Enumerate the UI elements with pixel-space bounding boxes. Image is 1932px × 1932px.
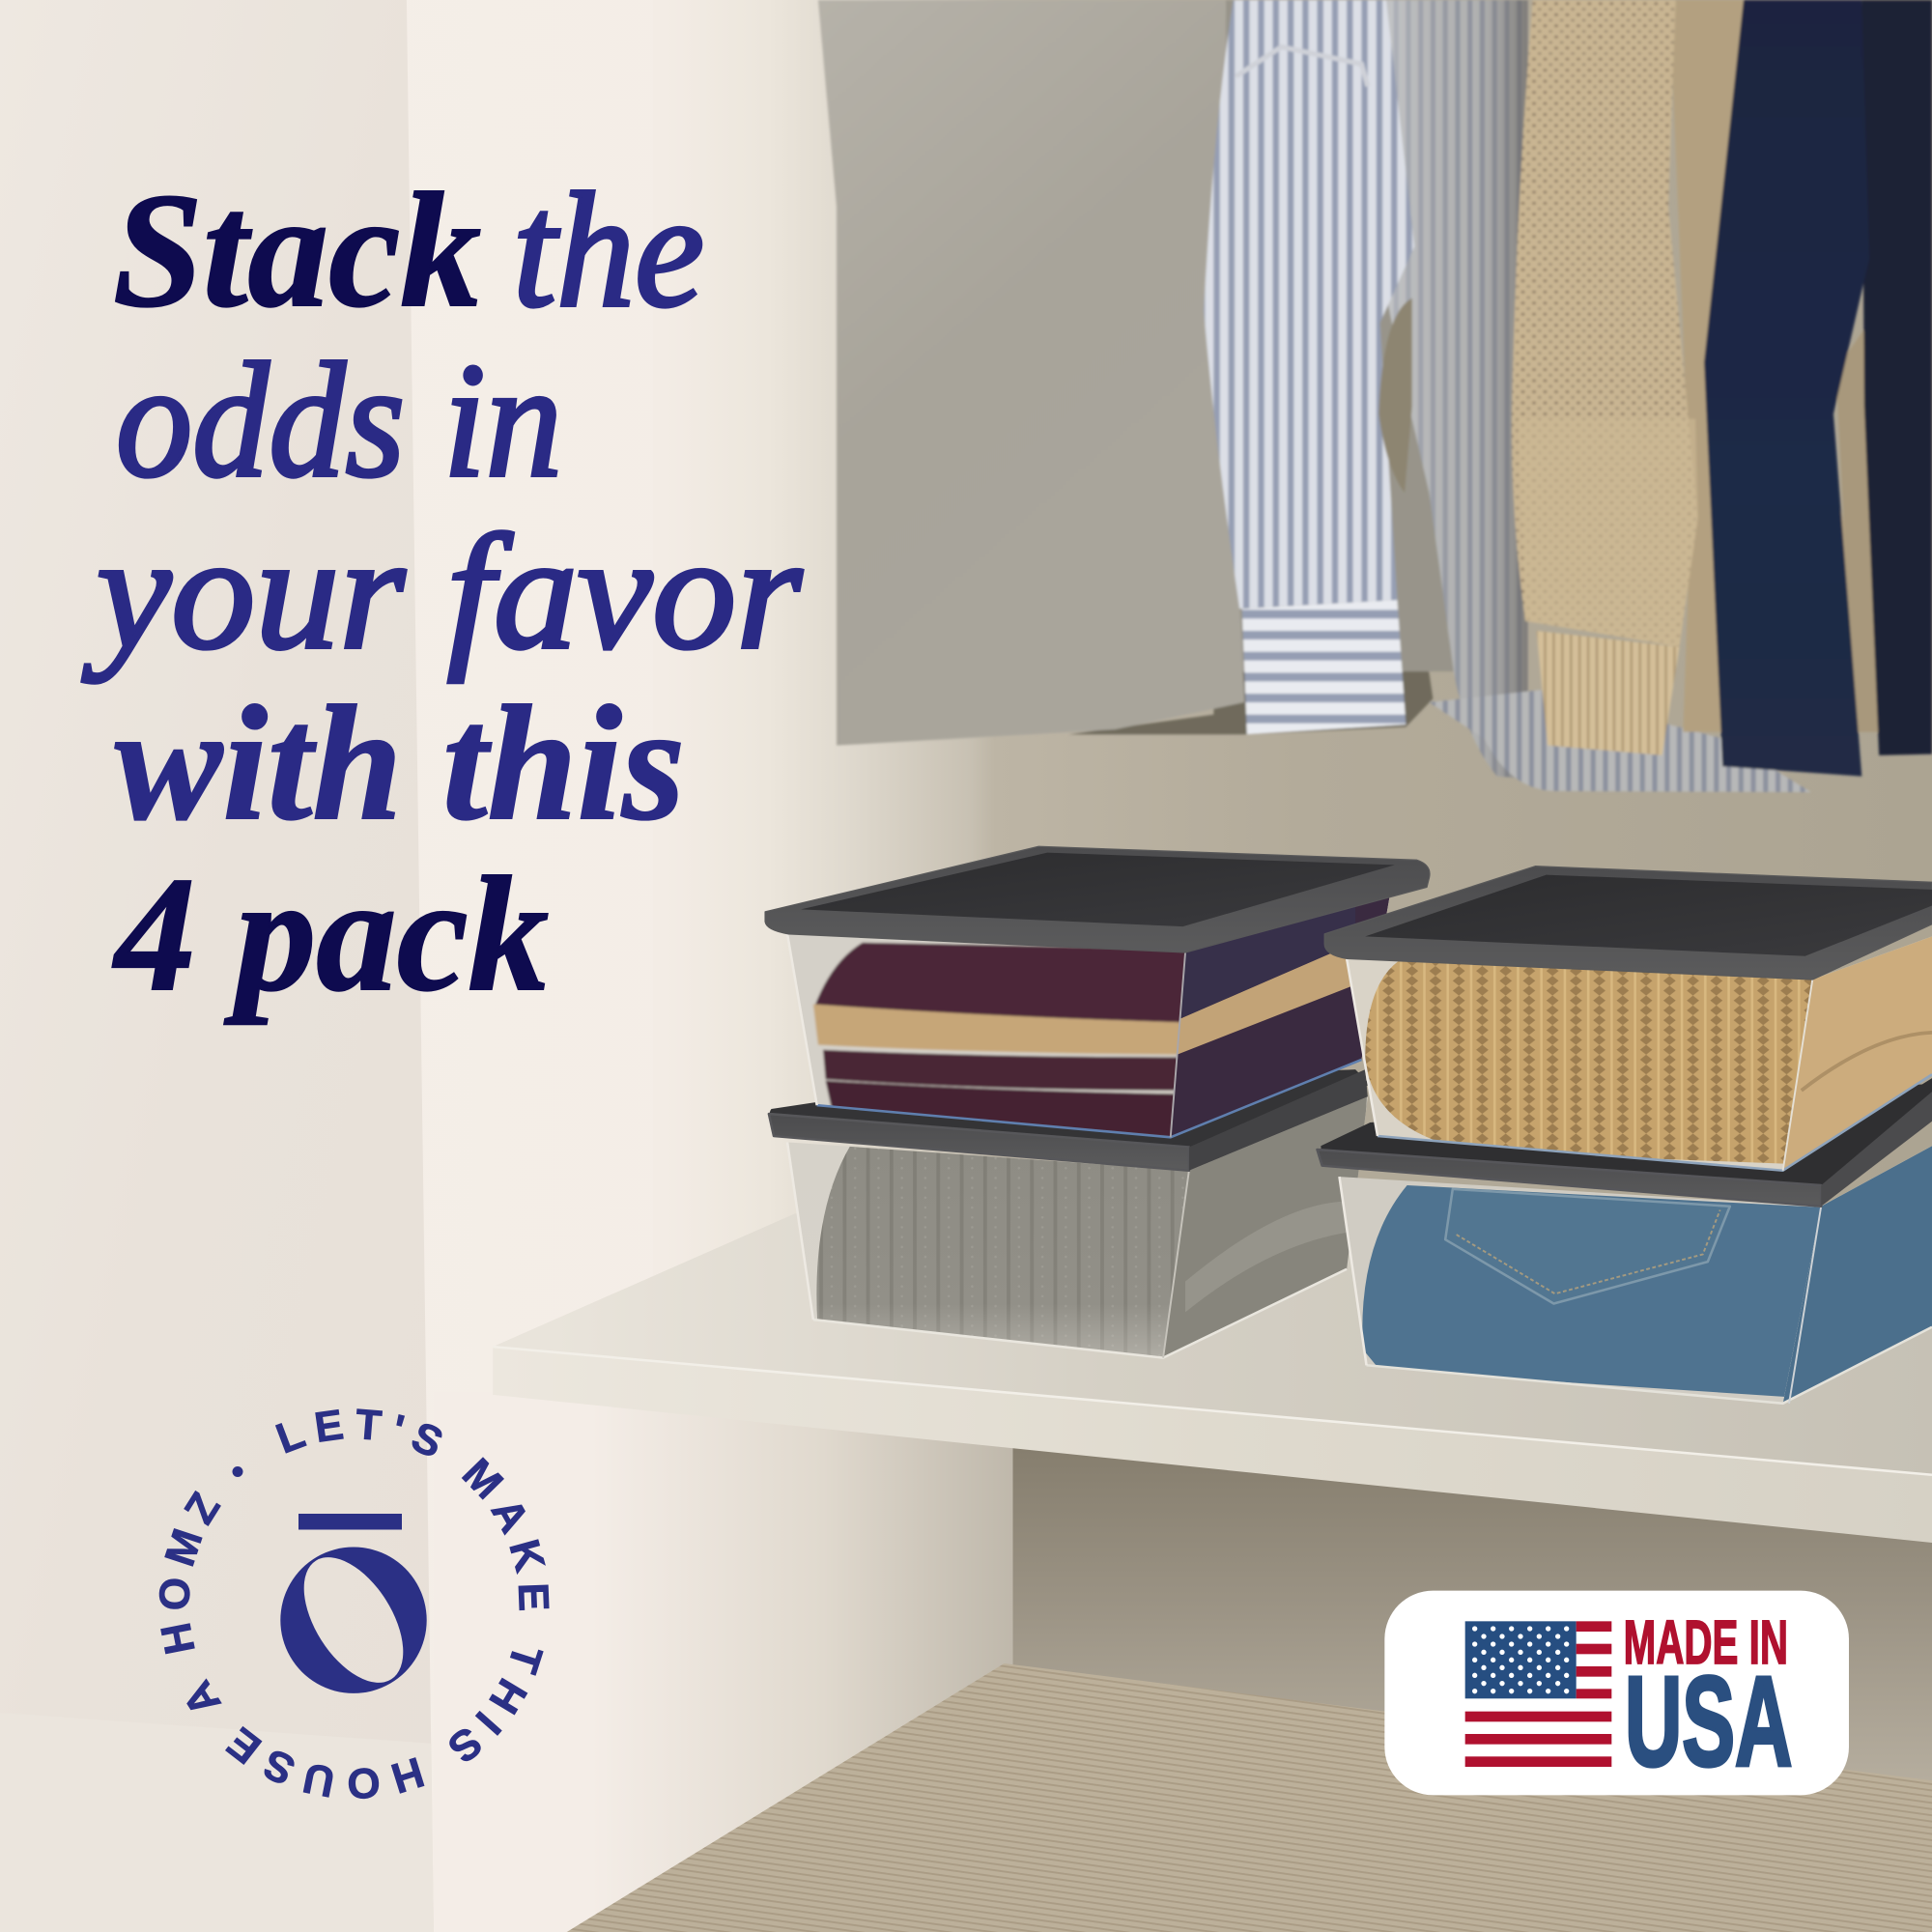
navy trousers front leg: [1704, 0, 1869, 777]
logo macron bar: [298, 1514, 402, 1530]
beige sleeve lower shading: [1518, 419, 1698, 647]
storage box: top left: [765, 846, 1430, 1146]
grey sweater side: [1163, 1084, 1368, 1358]
denim back pocket: [1445, 1189, 1730, 1303]
rear wall below shelf: [1012, 1417, 1932, 1808]
storage box: bottom right: [1318, 1078, 1932, 1404]
beige sweater sleeve: [1512, 0, 1698, 647]
lid recessed top: [801, 853, 1395, 926]
headline line: with this: with this: [115, 672, 685, 854]
left panel floor strip: [0, 1713, 434, 1932]
headline line: your favor: your favor: [82, 501, 803, 683]
left wall below shelf: [434, 1392, 1012, 1932]
beige sweater behind: [1669, 0, 1886, 739]
carpet floor: [567, 1663, 1932, 1932]
maroon and tan folded sweaters: [811, 941, 1184, 1136]
circular slogan: [189, 1438, 520, 1769]
striped shirt hem: [1430, 690, 1811, 792]
lid: [765, 846, 1430, 952]
beige sweater rib cuff: [1537, 631, 1680, 755]
lid: [1324, 867, 1932, 980]
made in USA badge: [1384, 1591, 1849, 1795]
denim side: [1783, 1146, 1932, 1404]
box frosted haze: [787, 1142, 1189, 1358]
inner backdrop: [1220, 0, 1521, 671]
headline line: 4 pack: 4 pack: [112, 843, 549, 1025]
badge background: [1384, 1591, 1849, 1795]
back wall above shelf: [653, 0, 1932, 1380]
american flag: [1465, 1621, 1611, 1767]
lid recessed top: [1365, 875, 1932, 956]
hanging clothes: [818, 0, 1932, 792]
grey t-shirt: [818, 0, 1244, 746]
striped shirt cuff: [1242, 600, 1406, 734]
gold knit sweater: [1365, 961, 1817, 1164]
gold sweater side: [1783, 936, 1932, 1171]
sleeve seam: [1236, 46, 1368, 86]
striped shirt body: [1386, 0, 1528, 779]
badge text: USA: USA: [1625, 1650, 1792, 1792]
storage box: top right: [1324, 867, 1932, 1171]
headline word: the: the: [513, 159, 704, 341]
left wall panel: [0, 0, 434, 1932]
badge text: made in: MADE IN: [1624, 1607, 1788, 1677]
lid: [769, 1069, 1370, 1171]
denim jeans: [1362, 1185, 1824, 1399]
brand logo seal: LET'S MAKE THIS HOUSE A HOMZ: [158, 1408, 550, 1799]
lid: [1321, 1078, 1932, 1189]
slogan separator dot: [232, 1466, 243, 1477]
headline: [82, 159, 803, 1025]
box side contents: [1171, 881, 1392, 1137]
headline word: Stack: Stack: [113, 159, 481, 341]
striped shirt sleeve: [1204, 0, 1414, 609]
shadow beneath hanging garments: [1068, 591, 1433, 734]
headline line: odds in: odds in: [116, 329, 562, 511]
shelf: [493, 1213, 1932, 1543]
navy trousers rear leg: [1861, 0, 1932, 755]
storage box: bottom left: [769, 1069, 1370, 1361]
gap behind sleeve: [1378, 298, 1412, 493]
logo letter o: [280, 1548, 427, 1693]
grey sweater: [816, 1146, 1195, 1361]
